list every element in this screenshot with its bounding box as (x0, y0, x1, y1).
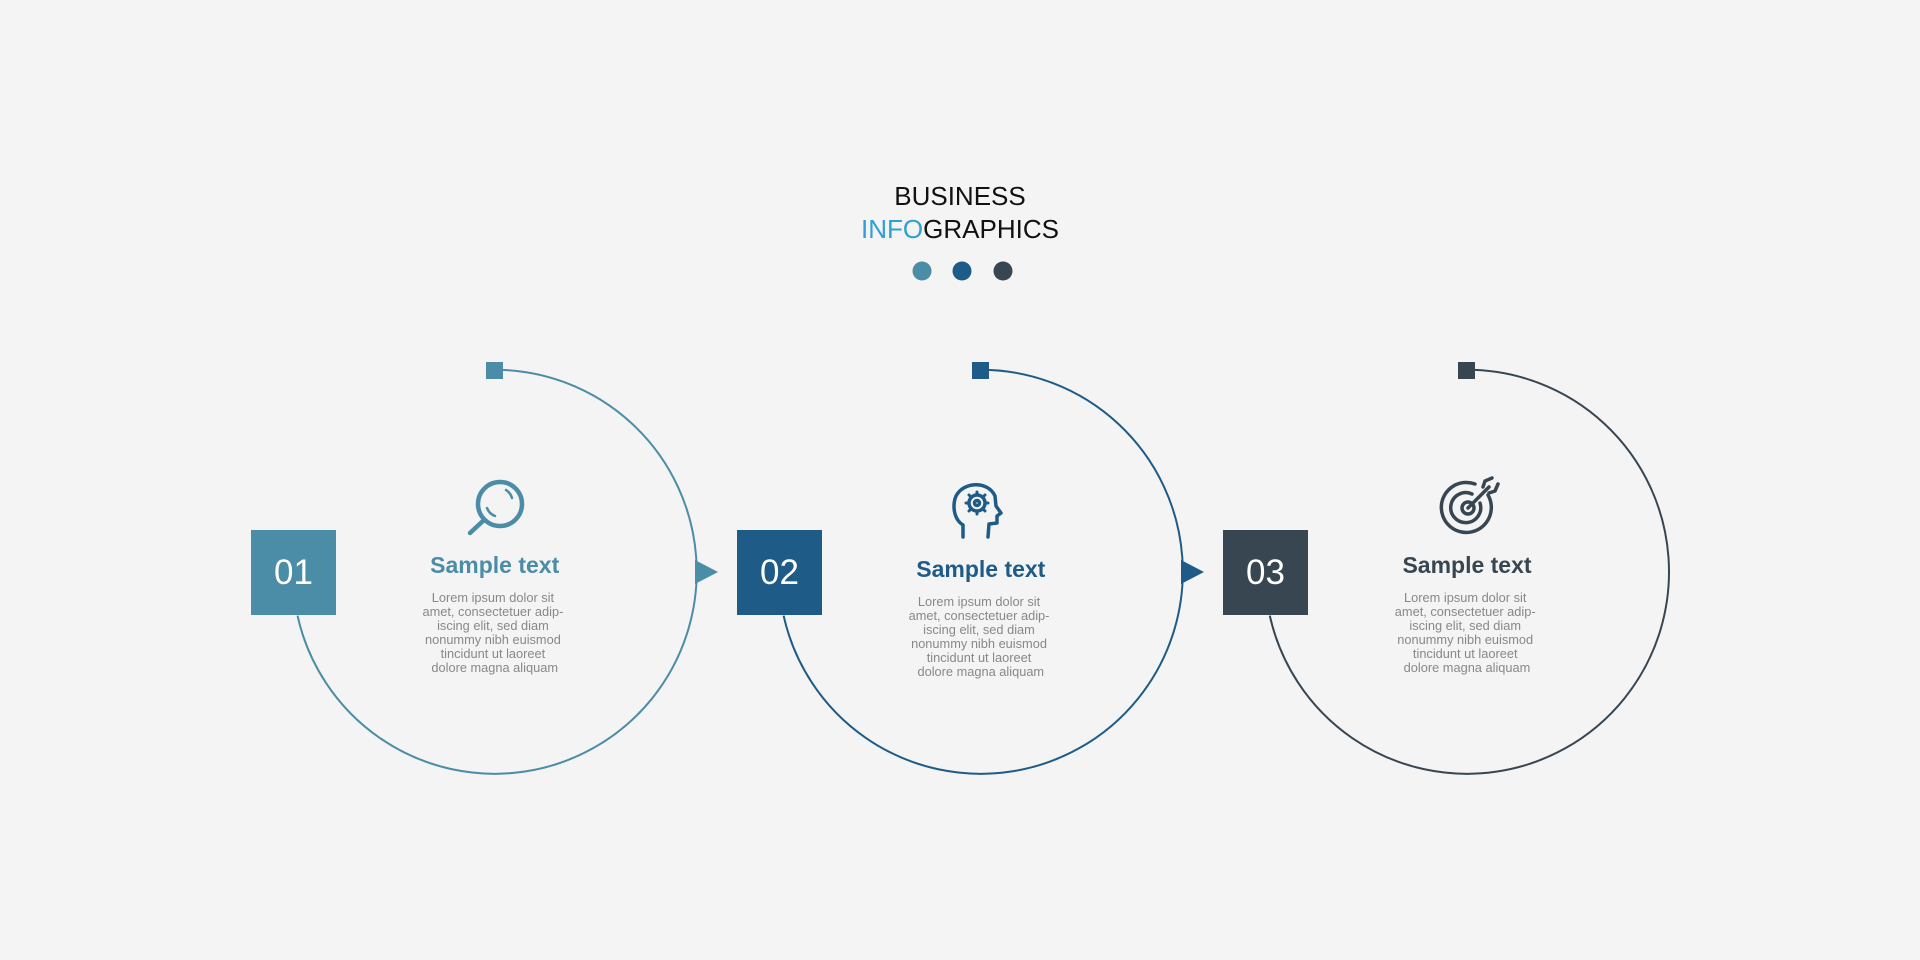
arrow 1 (695, 560, 718, 584)
body 2: iscing elit, sed diam (923, 622, 1035, 637)
body 1: amet, consectetuer adip- (422, 604, 563, 619)
icon: head with gear (954, 485, 1001, 537)
number box 01: 01 (274, 553, 313, 592)
icon: target (1441, 478, 1498, 532)
icon: magnifier (470, 482, 522, 533)
body 2: nonummy nibh euismod (911, 636, 1047, 651)
body 3: nonummy nibh euismod (1397, 632, 1533, 647)
number box 02: 02 (760, 553, 799, 592)
body 2: Lorem ipsum dolor sit (918, 594, 1041, 609)
arrow 2 (1181, 560, 1204, 584)
number box 02 (737, 530, 822, 615)
body 1: Lorem ipsum dolor sit (432, 590, 555, 605)
heading 1: Sample text (430, 552, 560, 578)
panel: step 02 (737, 362, 1204, 774)
body 3: iscing elit, sed diam (1409, 618, 1521, 633)
body 3: Lorem ipsum dolor sit (1404, 590, 1527, 605)
body 3: tincidunt ut laoreet (1413, 646, 1518, 661)
title (861, 181, 1059, 244)
body 1: nonummy nibh euismod (425, 632, 561, 647)
number box 03 (1223, 530, 1308, 615)
body 1: tincidunt ut laoreet (441, 646, 546, 661)
panel: step 03 (1223, 362, 1669, 774)
title: BUSINESS (894, 181, 1026, 211)
heading 3: Sample text (1402, 552, 1532, 578)
body 2: amet, consectetuer adip- (909, 608, 1049, 623)
body 3: dolore magna aliquam (1404, 660, 1530, 675)
body 2: tincidunt ut laoreet (927, 650, 1032, 665)
number box 03: 03 (1246, 553, 1285, 592)
heading 2: Sample text (916, 556, 1046, 582)
number box 01 (251, 530, 336, 615)
body 1: iscing elit, sed diam (437, 618, 549, 633)
body 2: dolore magna aliquam (917, 664, 1044, 679)
body 3: amet, consectetuer adip- (1395, 604, 1536, 619)
panel: step 01 (251, 362, 718, 774)
body 1: dolore magna aliquam (431, 660, 558, 675)
title: INFOGRAPHICS (861, 214, 1059, 244)
title dots (912, 262, 1012, 280)
